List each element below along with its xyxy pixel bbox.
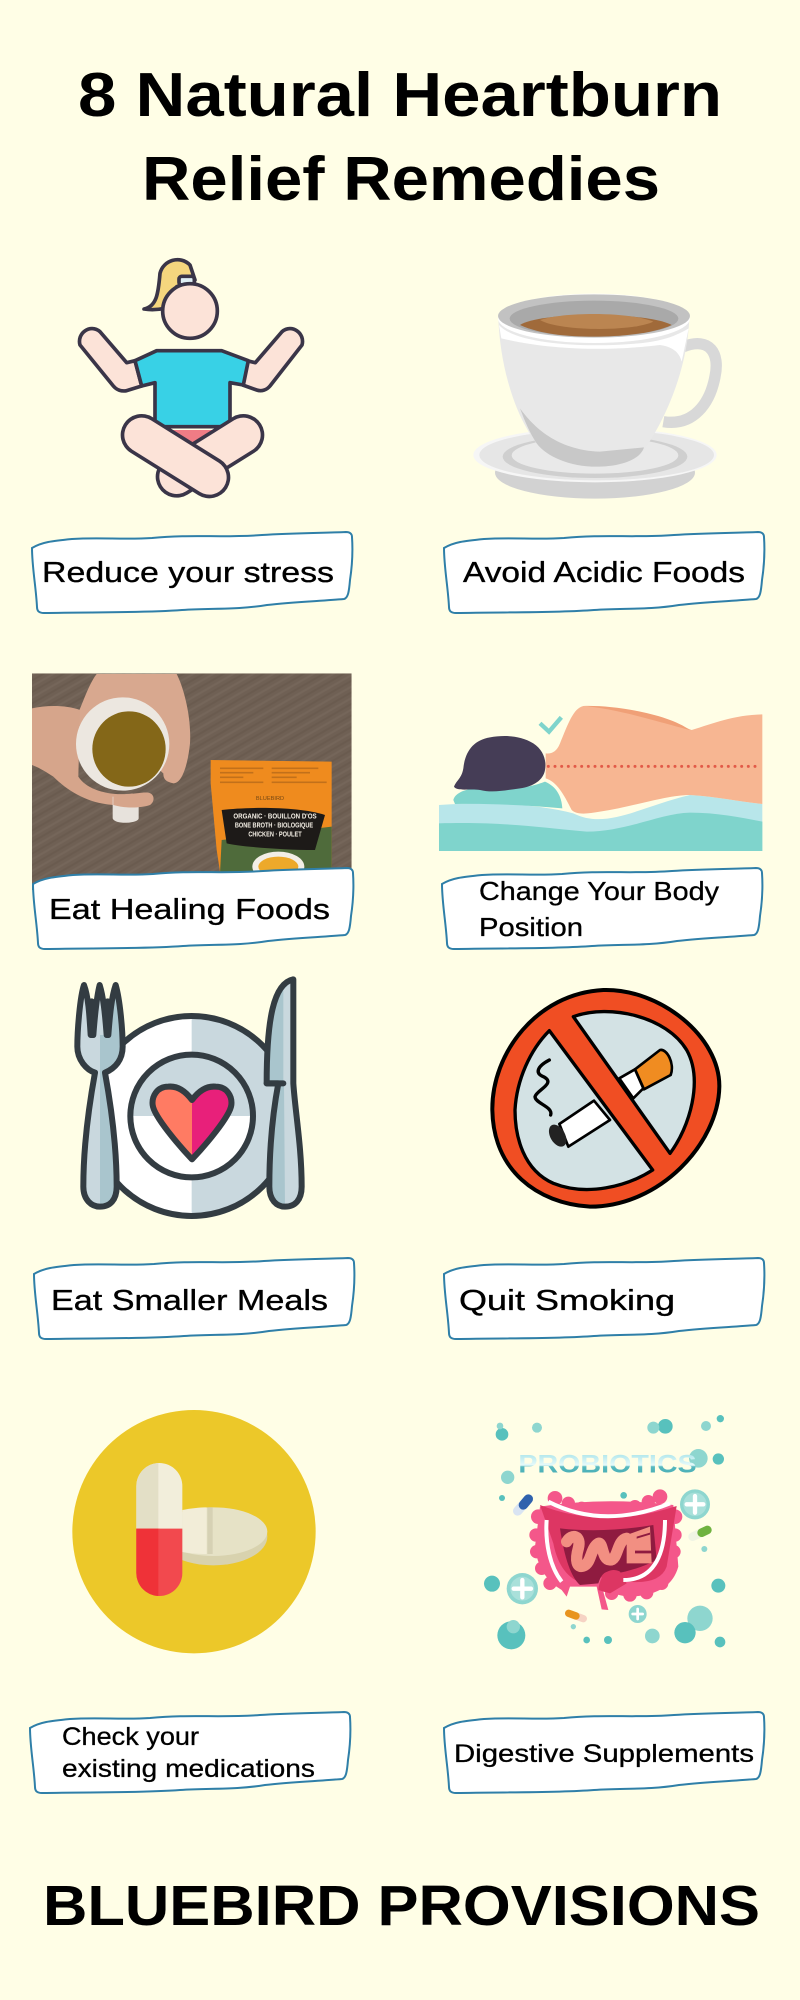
- label: reduce your stress: Reduce your stress: [42, 557, 334, 589]
- photo: hands holding broth cup and product bag: BLUEBIRD: [256, 796, 284, 802]
- photo: hands holding broth cup and product bag: BONE BROTH · BIOLOGIQUE: [235, 823, 313, 830]
- label: quit smoking: Quit Smoking: [459, 1285, 675, 1317]
- label: reduce your stress: [32, 532, 352, 613]
- label: check your existing medications: [30, 1712, 350, 1793]
- icon: plate with heart, fork and knife: [77, 979, 302, 1216]
- label: digestive supplements: [444, 1712, 764, 1793]
- label: eat smaller meals: [34, 1258, 354, 1339]
- illustration: sleeping position: [439, 706, 762, 851]
- icon: capsule and tablet on yellow disc: [72, 1410, 316, 1653]
- icon: coffee cup on saucer: [473, 294, 717, 499]
- icon: no smoking sign: [492, 990, 719, 1207]
- label: check your existing medications: existing medications: [62, 1755, 315, 1783]
- label: avoid acidic foods: Avoid Acidic Foods: [463, 557, 745, 589]
- title: 8 Natural Heartburn: [78, 61, 722, 130]
- photo: hands holding broth cup and product bag: CHICKEN · POULET: [248, 832, 302, 839]
- label: change your body position: Change Your Body: [479, 876, 719, 906]
- label: quit smoking: [444, 1258, 764, 1339]
- photo: hands holding broth cup and product bag: [32, 673, 352, 890]
- label: eat smaller meals: Eat Smaller Meals: [51, 1285, 328, 1317]
- label: avoid acidic foods: [444, 532, 764, 613]
- title: [78, 61, 722, 214]
- label: digestive supplements: Digestive Supplements: [454, 1740, 754, 1768]
- title: Relief Remedies: [142, 145, 660, 214]
- label: eat healing foods: [33, 868, 353, 949]
- label: eat healing foods: Eat Healing Foods: [49, 894, 330, 926]
- label: change your body position: [442, 868, 762, 949]
- illustration: probiotics and intestines: PROBIOTICS: [518, 1452, 697, 1479]
- label: change your body position: Position: [479, 912, 583, 942]
- illustration: probiotics and intestines: [484, 1415, 725, 1649]
- label: check your existing medications: Check your: [62, 1723, 199, 1751]
- footer brand name: BLUEBIRD PROVISIONS: [43, 1874, 760, 1938]
- photo: hands holding broth cup and product bag: ORGANIC · BOUILLON D'OS: [233, 813, 317, 820]
- icon: meditating person: [79, 260, 303, 477]
